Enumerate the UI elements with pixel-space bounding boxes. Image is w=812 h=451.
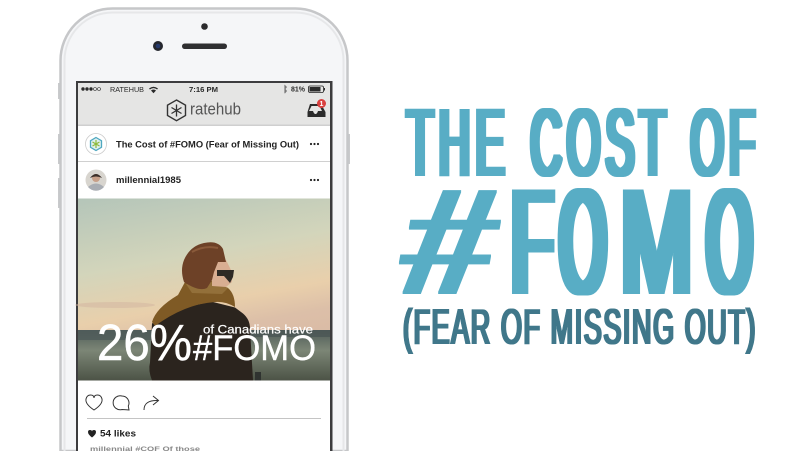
logo: ratehub: ratehub bbox=[190, 100, 241, 118]
heading: #FOMO: M bbox=[621, 158, 692, 325]
photo: person facing sunset by water bbox=[75, 198, 330, 380]
status bar bbox=[81, 85, 325, 94]
menu dots bbox=[310, 179, 319, 181]
heading: THE COST OF: THE bbox=[407, 90, 510, 196]
icon: comment bbox=[113, 396, 129, 410]
post row: millennial1985 bbox=[86, 170, 319, 191]
app header bbox=[78, 83, 330, 126]
menu dots bbox=[310, 143, 319, 145]
post row: millennial1985: millennial1985 bbox=[116, 175, 181, 185]
post row: The Cost of FOMO: The Cost of #FOMO (Fear of Missing Out) bbox=[116, 140, 299, 150]
stat: 26% of Canadians have #FOMO: of Canadians have bbox=[203, 324, 313, 336]
logo: ratehub bbox=[168, 100, 241, 121]
phone bbox=[58, 8, 350, 451]
speaker bbox=[182, 44, 227, 49]
likes count: 54 likes bbox=[100, 428, 136, 438]
heading: #FOMO: O bbox=[560, 158, 606, 325]
icon: notification inbox: 1 bbox=[320, 101, 324, 108]
heading: THE COST OF bbox=[407, 90, 760, 196]
heading: #FOMO: F bbox=[511, 158, 553, 325]
stat: 26% of Canadians have #FOMO: #FOMO bbox=[193, 329, 316, 368]
screen bbox=[78, 83, 330, 451]
title bbox=[392, 90, 760, 354]
screen bezel bbox=[76, 81, 332, 451]
front sensor bbox=[201, 23, 208, 30]
icon: share bbox=[144, 396, 158, 410]
post row: The Cost of FOMO bbox=[78, 134, 330, 162]
person bbox=[149, 242, 253, 380]
heading: #FOMO: # bbox=[392, 158, 508, 325]
heading: #FOMO bbox=[392, 158, 752, 325]
post actions bbox=[86, 395, 158, 410]
divider bbox=[87, 418, 321, 419]
icon: heart bbox=[86, 395, 102, 410]
status bar: 7:16 PM bbox=[189, 87, 218, 94]
phone side buttons bbox=[58, 83, 350, 208]
icon: notification inbox bbox=[308, 99, 326, 117]
status bar: RATEHUB bbox=[110, 87, 144, 94]
status bar: 81% bbox=[291, 86, 306, 94]
stat: 26% of Canadians have #FOMO bbox=[97, 314, 316, 371]
front camera bbox=[153, 41, 163, 51]
phone body bbox=[60, 8, 348, 451]
stat: 26% of Canadians have #FOMO: 26% bbox=[97, 314, 192, 371]
avatar: ratehub logo bbox=[86, 134, 106, 154]
avatar: user bbox=[86, 170, 106, 191]
